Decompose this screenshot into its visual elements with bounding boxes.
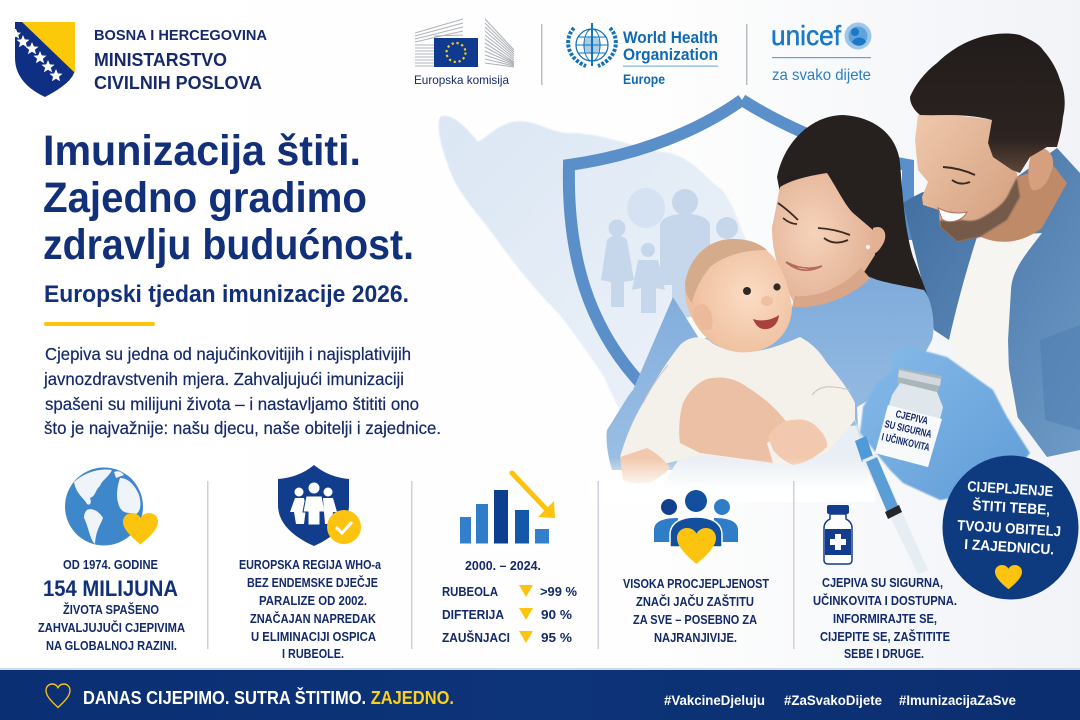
footer slogan: DANAS CIJEPIMO. SUTRA ŠTITIMO. ZAJEDNO. <box>83 687 454 708</box>
vial label text: SU SIGURNA <box>883 418 933 441</box>
icon: syringe <box>855 420 928 574</box>
ministry name <box>94 27 267 93</box>
hashtags: #ImunizacijaZaSve <box>899 693 1016 708</box>
logo: UNICEF: za svako dijete <box>772 67 871 84</box>
polio text: U ELIMINACIJI OSPICA <box>251 630 376 644</box>
map of Bosnia and Herzegovina <box>439 116 752 440</box>
safety text: UČINKOVITA I DOSTUPNA. <box>813 593 957 608</box>
safety text: CJEPIVA SU SIGURNA, <box>822 576 943 590</box>
statistic text: ZAHVALJUJUČI CJEPIVIMA <box>38 620 185 635</box>
logo: World Health Organization Europe: Europe <box>623 71 665 87</box>
safety text: SEBE I DRUGE. <box>844 647 924 661</box>
father <box>903 34 1080 457</box>
disease table: 95 % <box>541 631 572 645</box>
callout: vaccination protects: CIJEPLJENJE <box>967 479 1054 500</box>
panel: lives saved <box>38 468 185 653</box>
footer banner <box>0 668 1080 720</box>
polio text: BEZ ENDEMSKE DJEČJE <box>247 575 378 590</box>
statistic text: OD 1974. GODINE <box>63 558 158 572</box>
disease table: DIFTERIJA <box>442 608 504 622</box>
photo: father, mother and baby <box>590 34 1080 502</box>
title <box>43 127 414 269</box>
coverage text: ZNAČI JAČU ZAŠTITU <box>636 594 754 609</box>
safety text <box>813 576 957 661</box>
safety text: INFORMIRAJTE SE, <box>833 612 937 626</box>
photo bottom fade <box>590 458 875 490</box>
logo: World Health Organization Europe: Organization <box>623 45 718 64</box>
coverage text: VISOKA PROCJEPLJENOST <box>623 577 769 591</box>
mother <box>607 115 934 470</box>
logo: World Health Organization Europe: World Health <box>623 28 718 47</box>
disease table: RUBEOLA <box>442 585 498 599</box>
logo: Bosnia and Herzegovina coat of arms <box>15 22 75 97</box>
disease table: >99 % <box>540 585 577 599</box>
polio text <box>239 558 382 661</box>
title: Imunizacija štiti. <box>43 127 361 175</box>
disease table: ZAUŠNJACI <box>442 630 510 645</box>
polio text: ZNAČAJAN NAPREDAK <box>250 611 376 626</box>
logo: European Commission: Europska komisija <box>414 73 509 87</box>
disease table: 90 % <box>541 608 572 622</box>
intro paragraph: što je najvažnije: našu djecu, naše obitelji i zajednice. <box>44 418 441 438</box>
vial label text: CJEPIVA <box>894 408 929 427</box>
disease table <box>442 585 577 645</box>
logo: European Commission <box>414 19 514 87</box>
icon: globe with heart <box>65 468 158 546</box>
polio text: EUROPSKA REGIJA WHO-a <box>239 558 382 572</box>
icon: heart outline <box>46 684 70 707</box>
panel: disease decline <box>442 473 577 645</box>
title: zdravlju budućnost. <box>43 221 414 269</box>
intro paragraph: spašeni su milijuni života – i nastavljamo štititi ono <box>45 394 419 414</box>
logo: UNICEF <box>771 20 872 84</box>
panel: high coverage <box>623 490 769 645</box>
callout: vaccination protects <box>942 456 1078 600</box>
statistic text: NA GLOBALNOJ RAZINI. <box>46 639 177 653</box>
intro paragraph: Cjepiva su jedna od najučinkovitijih i najisplativijih <box>45 344 411 364</box>
logo: World Health Organization Europe <box>568 23 718 87</box>
polio text: PARALIZE OD 2002. <box>259 594 367 608</box>
period label: 2000. – 2024. <box>465 559 541 573</box>
callout: vaccination protects: ŠTITI TEBE, <box>972 496 1051 519</box>
logo: UNICEF: unicef <box>771 20 841 51</box>
header logos <box>15 19 872 97</box>
ministry name: MINISTARSTVO <box>94 50 227 70</box>
coverage text: ZA SVE – POSEBNO ZA <box>633 613 757 627</box>
icon: vaccine bottle <box>824 505 852 564</box>
hashtags <box>664 693 1016 708</box>
bar chart <box>460 490 549 544</box>
baby <box>620 239 870 490</box>
subtitle: Europski tjedan imunizacije 2026. <box>44 281 409 308</box>
panel: polio free region <box>239 465 382 661</box>
intro paragraph: javnozdravstvenih mjera. Zahvaljujući imunizaciji <box>43 369 404 389</box>
coverage text: NAJRANJIVIJE. <box>654 631 737 645</box>
icon: gloved hand holding vaccine vial <box>860 345 1030 500</box>
hashtags: #ZaSvakoDijete <box>784 693 882 708</box>
safety text: CIJEPITE SE, ZAŠTITITE <box>820 629 950 644</box>
icon: shield with family and check <box>278 465 361 546</box>
hashtags: #VakcineDjeluju <box>664 693 765 708</box>
coverage text <box>623 577 769 645</box>
statistic text <box>38 558 185 653</box>
vial label text <box>880 408 933 454</box>
icon: people with heart <box>654 490 738 564</box>
title: Zajedno gradimo <box>43 174 367 222</box>
yellow accent rule <box>44 322 155 326</box>
family silhouettes in shield <box>601 188 738 317</box>
intro paragraph <box>43 344 441 438</box>
callout: vaccination protects: TVOJU OBITELJ <box>957 518 1062 540</box>
statistic text: ŽIVOTA SPAŠENO <box>63 602 159 617</box>
callout: vaccination protects: I ZAJEDNICU. <box>964 537 1055 558</box>
ministry name: CIVILNIH POSLOVA <box>94 73 262 93</box>
vial label text: I UČINKOVITA <box>880 430 931 454</box>
ministry name: BOSNA I HERCEGOVINA <box>94 27 267 44</box>
polio text: I RUBEOLE. <box>282 647 344 661</box>
protective shield outline <box>569 100 908 395</box>
statistic text: 154 MILIJUNA <box>43 576 178 601</box>
panel: vaccines are safe <box>813 505 957 661</box>
arrow: downward trend <box>512 473 555 518</box>
